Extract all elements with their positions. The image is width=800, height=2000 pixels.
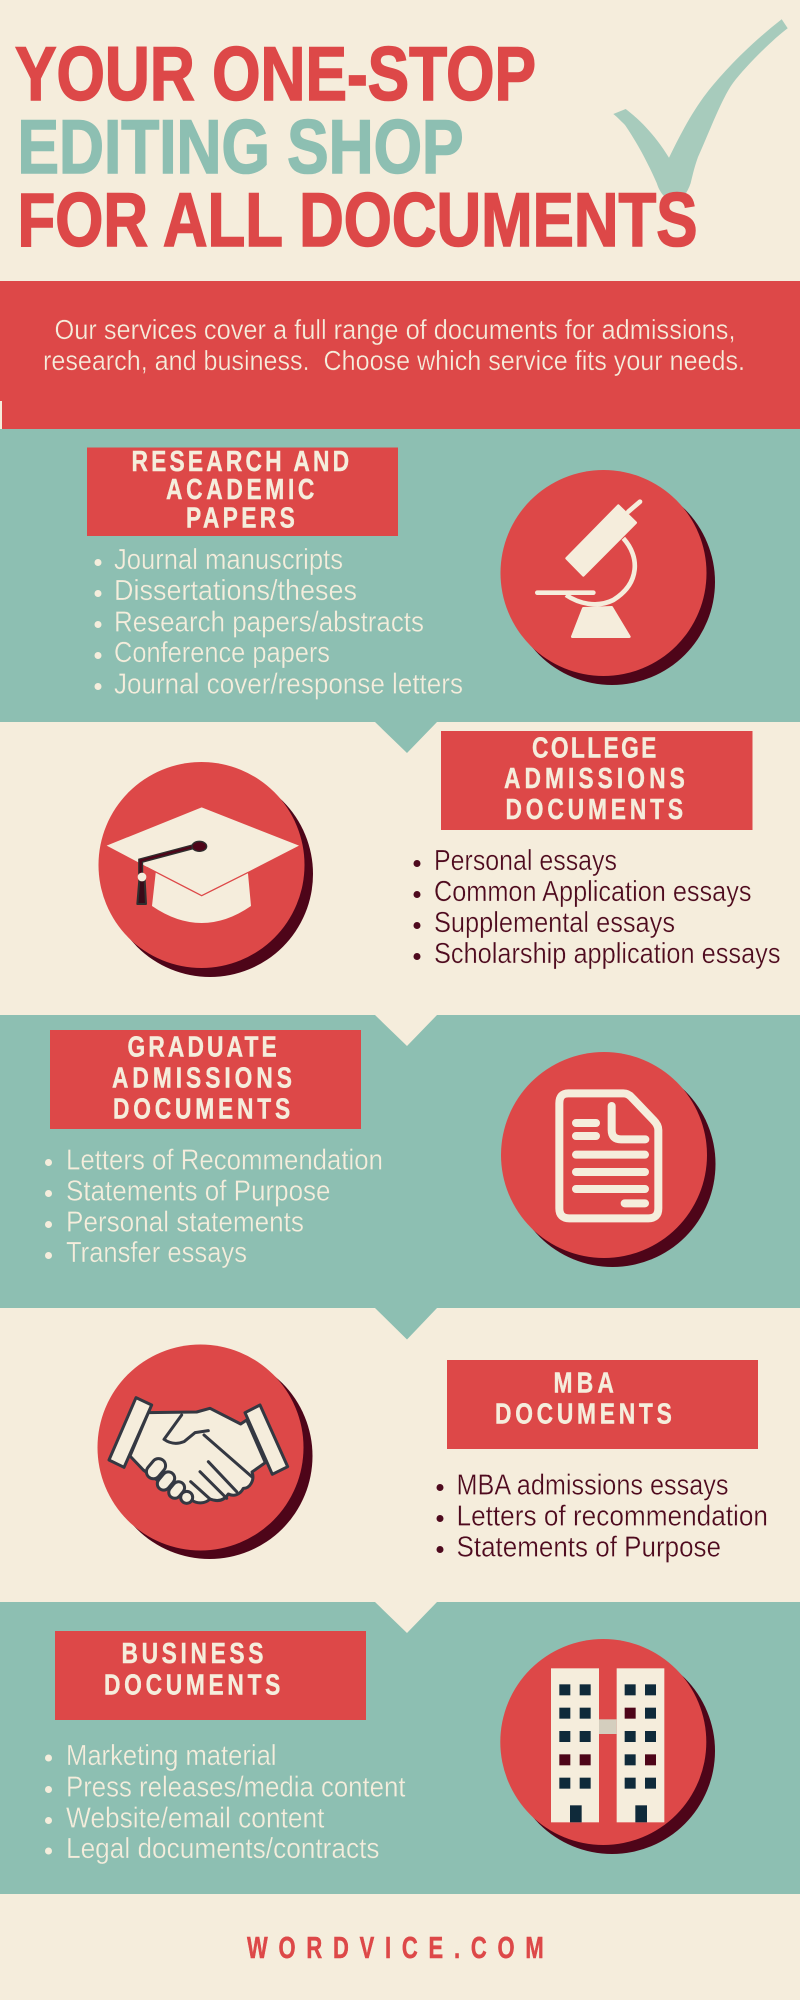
list: MBA services: Statements of Purpose — [456, 1532, 721, 1564]
heading: college admissions documents — [441, 731, 752, 830]
list: business services: Marketing material — [66, 1740, 276, 1772]
panel: research and academic papers — [0, 429, 800, 722]
list: research services: Conference papers — [114, 637, 330, 669]
icon: handshake — [98, 1344, 312, 1559]
heading: MBA documents: MBA — [554, 1368, 614, 1399]
icon: checkmark — [613, 19, 788, 196]
list: research services — [94, 544, 463, 700]
heading: college admissions documents: COLLEGE — [532, 733, 656, 764]
panel: intro band — [0, 281, 800, 429]
title — [15, 32, 698, 263]
icon: document — [501, 1052, 716, 1267]
panel: graduate admissions documents — [0, 1015, 800, 1308]
list: graduate services: Personal statements — [66, 1206, 304, 1238]
intro text — [43, 314, 745, 376]
list: research services: Journal cover/response letters — [114, 668, 463, 700]
arrow: cream pointer — [375, 1602, 437, 1633]
intro text: research, and business. Choose which service fits your needs. — [43, 345, 745, 376]
list: graduate services: Letters of Recommendation — [66, 1144, 383, 1176]
heading: graduate admissions documents: DOCUMENTS — [113, 1094, 290, 1125]
list: MBA services: MBA admissions essays — [456, 1470, 728, 1502]
heading: graduate admissions documents: GRADUATE — [128, 1032, 277, 1063]
list: graduate services — [45, 1144, 383, 1269]
heading: MBA documents: DOCUMENTS — [495, 1399, 672, 1430]
list: business services: Website/email content — [66, 1802, 325, 1834]
panel: business documents — [0, 1602, 800, 1894]
list: research services: Journal manuscripts — [114, 544, 343, 576]
panel: college admissions documents — [0, 722, 800, 1015]
arrow: cream pointer — [375, 1015, 437, 1046]
intro text: Our services cover a full range of documents for admissions, — [54, 314, 736, 345]
list: college services: Personal essays — [434, 845, 617, 877]
list: MBA services — [436, 1470, 768, 1564]
heading: business documents — [55, 1631, 366, 1720]
arrow: teal pointer — [375, 722, 437, 753]
list: business services: Press releases/media content — [66, 1772, 406, 1804]
list: research services: Dissertations/theses — [114, 575, 357, 607]
icon: office buildings — [500, 1639, 715, 1854]
list: college services: Supplemental essays — [434, 907, 675, 939]
list: college services — [414, 845, 780, 970]
list: business services: Legal documents/contracts — [66, 1833, 380, 1865]
heading: MBA documents — [447, 1360, 758, 1449]
heading: research and academic papers: ACADEMIC — [166, 475, 314, 506]
list: research services: Research papers/abstracts — [114, 606, 424, 638]
heading: research and academic papers — [87, 447, 398, 536]
heading: college admissions documents: DOCUMENTS — [506, 795, 683, 826]
list: business services — [45, 1740, 406, 1865]
list: graduate services: Statements of Purpose — [66, 1176, 330, 1208]
heading: research and academic papers: RESEARCH AND — [132, 447, 349, 478]
arrow: teal pointer — [375, 1308, 437, 1340]
heading: business documents: BUSINESS — [122, 1639, 263, 1670]
footer: website: WORDVICE.COM — [247, 1930, 544, 1965]
header: title and checkmark — [15, 19, 788, 263]
heading: graduate admissions documents: ADMISSIONS — [112, 1063, 292, 1094]
title: EDITING SHOP — [18, 105, 463, 190]
heading: graduate admissions documents — [50, 1030, 361, 1129]
heading: research and academic papers: PAPERS — [186, 503, 295, 534]
panel: MBA documents — [0, 1308, 800, 1602]
list: MBA services: Letters of recommendation — [456, 1500, 768, 1532]
title: YOUR ONE-STOP — [15, 32, 536, 117]
list: graduate services: Transfer essays — [66, 1237, 247, 1269]
heading: business documents: DOCUMENTS — [104, 1670, 280, 1701]
icon: graduation cap — [98, 762, 313, 977]
heading: college admissions documents: ADMISSIONS — [504, 764, 685, 795]
list: college services: Common Application essays — [434, 876, 752, 908]
icon: microscope — [500, 470, 715, 685]
